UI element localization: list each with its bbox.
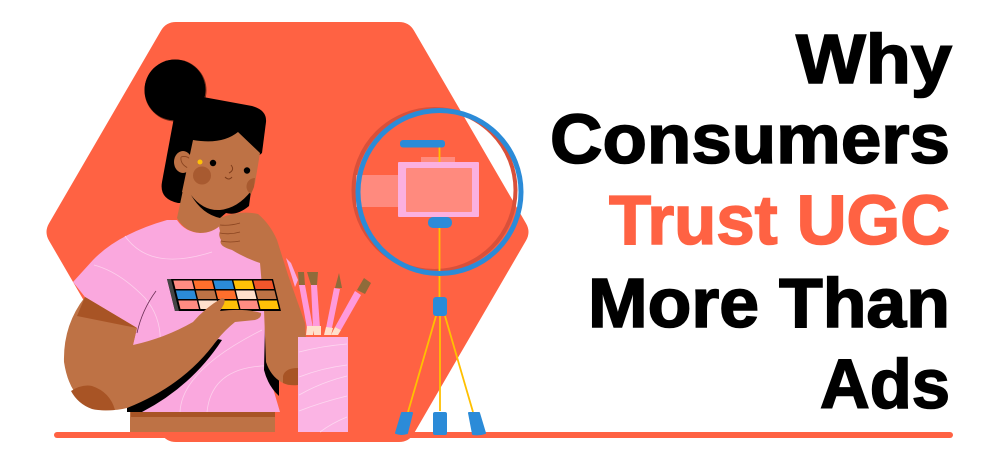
neck <box>177 190 224 233</box>
title line: Trust UGC: Trust UGC <box>609 181 950 259</box>
elbow patch <box>283 368 298 385</box>
pants <box>130 412 275 432</box>
ear <box>174 151 192 173</box>
hair bun <box>144 60 206 121</box>
elbow patch <box>71 386 115 410</box>
earring <box>198 160 202 164</box>
title line: Ads: Ads <box>820 345 950 423</box>
camera top <box>421 157 455 163</box>
brush 1 <box>298 272 313 328</box>
camera lens <box>356 175 398 207</box>
makeup brushes <box>298 272 371 335</box>
eyes <box>210 160 250 174</box>
arm shadow <box>127 339 222 412</box>
ring light and camera on tripod <box>354 109 521 434</box>
brush cup <box>298 337 348 432</box>
right sleeve sliver <box>286 258 298 287</box>
left arm and palette hand <box>64 297 261 410</box>
sleeve shadow <box>77 297 137 328</box>
ground line <box>54 432 953 438</box>
tripod feet <box>396 413 485 434</box>
title line: Why: Why <box>796 20 952 98</box>
shirt fold lines <box>94 236 280 412</box>
ring light <box>358 110 521 274</box>
hair <box>162 97 266 203</box>
poles and legs <box>408 147 473 412</box>
title line: More Than: More Than <box>588 264 950 342</box>
ring shadow <box>354 109 516 271</box>
shirt crease <box>137 291 156 333</box>
raised arm and hand <box>219 213 306 385</box>
face <box>182 132 260 214</box>
title <box>550 20 952 423</box>
orange hexagon background <box>46 22 528 442</box>
right cheek <box>246 178 255 194</box>
camera screen <box>406 168 472 212</box>
side shadow <box>264 326 279 396</box>
palette row 1 <box>173 280 274 289</box>
eyeshadow palette <box>167 279 281 311</box>
brush ferrules <box>306 326 341 335</box>
illustration: woman with palette <box>64 60 306 432</box>
brush 2 <box>307 272 320 328</box>
brush 4 <box>335 278 371 330</box>
palette row 3 <box>178 300 279 309</box>
nose and mouth <box>225 165 233 179</box>
palette row 2 <box>176 290 276 299</box>
jaw shadow <box>191 191 251 218</box>
left cheek <box>193 166 211 184</box>
brush 3 <box>326 273 342 328</box>
t-shirt <box>73 220 280 412</box>
title line: Consumers: Consumers <box>550 100 950 178</box>
camera body <box>398 162 479 217</box>
finger lines <box>220 223 240 242</box>
tripod clamp <box>433 297 447 316</box>
top mount bar <box>400 140 445 148</box>
camera holder <box>428 217 452 228</box>
